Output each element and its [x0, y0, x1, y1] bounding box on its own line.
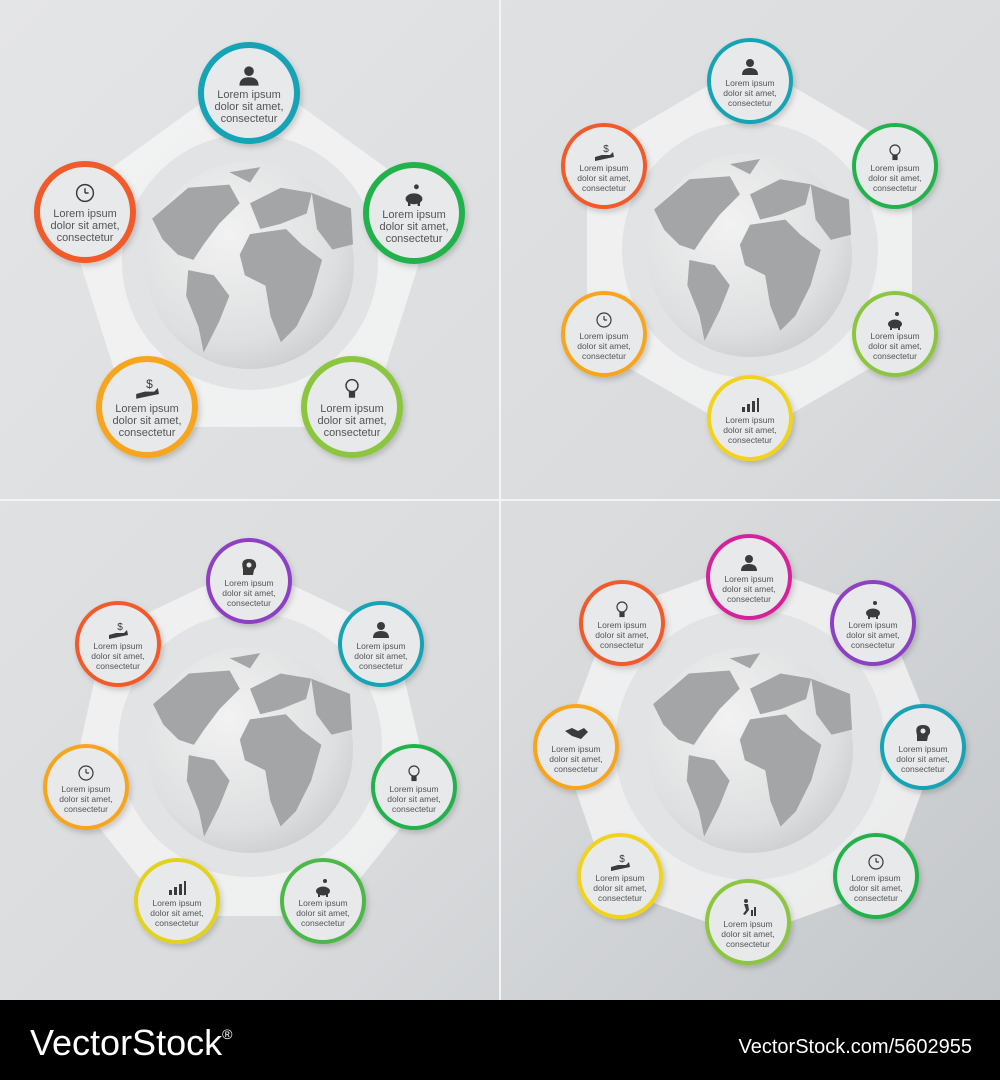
step circle: left: consectetur — [64, 804, 108, 814]
step circle: right: Lorem ipsum — [382, 209, 446, 221]
step circle: right: dolor sit amet, — [896, 754, 950, 764]
step circle: bottom right: consectetur — [324, 427, 381, 439]
step circle: lower left: dolor sit amet, — [593, 883, 647, 893]
step circle: top: Lorem ipsum — [724, 574, 774, 584]
step circle: bottom left: dolor sit amet, — [112, 415, 182, 427]
step circle: bottom: Lorem ipsum — [723, 919, 773, 929]
step circle: bottom right: consectetur — [873, 351, 917, 361]
step circle: upper right — [340, 603, 422, 685]
step circle: bottom left — [99, 359, 195, 455]
step circle: bottom left: consectetur — [119, 427, 176, 439]
step circle: top: Lorem ipsum — [217, 89, 281, 101]
step circle: right — [373, 746, 455, 828]
step circle: lower left: Lorem ipsum — [595, 873, 645, 883]
footer id: VectorStock.com/5602955 — [739, 1036, 972, 1058]
step circle: right: consectetur — [392, 804, 436, 814]
step circle: bottom — [709, 377, 791, 459]
step circle: bottom left: consectetur — [582, 351, 626, 361]
step circle: left: consectetur — [554, 764, 598, 774]
step circle: top: Lorem ipsum — [224, 578, 274, 588]
step circle: top right: dolor sit amet, — [868, 173, 922, 183]
step circle: top left: dolor sit amet, — [577, 173, 631, 183]
step circle: top right: consectetur — [873, 183, 917, 193]
step circle: upper left: consectetur — [600, 640, 644, 650]
step circle: top left: Lorem ipsum — [579, 163, 629, 173]
step circle: bottom right: dolor sit amet, — [868, 341, 922, 351]
step circle: top: dolor sit amet, — [214, 101, 284, 113]
step circle: upper right: Lorem ipsum — [848, 620, 898, 630]
step circle: top — [201, 45, 297, 141]
step circle: upper left: dolor sit amet, — [595, 630, 649, 640]
step circle: bottom left: Lorem ipsum — [152, 898, 202, 908]
step circle: lower left — [579, 835, 661, 917]
step circle: top: Lorem ipsum — [725, 78, 775, 88]
step circle: upper left: Lorem ipsum — [597, 620, 647, 630]
step circle: bottom: dolor sit amet, — [723, 425, 777, 435]
step circle: right: consectetur — [386, 233, 443, 245]
panel: eight-step diagram — [535, 536, 964, 963]
step circle: left — [45, 746, 127, 828]
step circle: top: consectetur — [727, 594, 771, 604]
step circle: bottom right: Lorem ipsum — [298, 898, 348, 908]
step circle: bottom: consectetur — [726, 939, 770, 949]
step circle: bottom left: consectetur — [155, 918, 199, 928]
step circle: top — [208, 540, 290, 622]
step circle: top — [709, 40, 791, 122]
footer logo: ® — [222, 1026, 233, 1042]
step circle: right: consectetur — [901, 764, 945, 774]
step circle: bottom left — [136, 860, 218, 942]
step circle: lower right: dolor sit amet, — [849, 883, 903, 893]
step circle: upper left: consectetur — [96, 661, 140, 671]
globe — [647, 647, 853, 853]
step circle: upper right: consectetur — [359, 661, 403, 671]
step circle: bottom: consectetur — [728, 435, 772, 445]
footer bar — [0, 1000, 1000, 1080]
step circle: top: consectetur — [728, 98, 772, 108]
step circle: top left — [563, 125, 645, 207]
step circle: lower right: consectetur — [854, 893, 898, 903]
step circle: upper right: consectetur — [851, 640, 895, 650]
step circle: bottom left: dolor sit amet, — [577, 341, 631, 351]
step circle: right: Lorem ipsum — [898, 744, 948, 754]
step circle: top: dolor sit amet, — [723, 88, 777, 98]
step circle: bottom right: dolor sit amet, — [317, 415, 387, 427]
panel: seven-step diagram — [45, 540, 455, 942]
step circle: right — [882, 706, 964, 788]
step circle: bottom right — [304, 359, 400, 455]
step circle: upper left — [581, 582, 663, 664]
step circle: bottom right: dolor sit amet, — [296, 908, 350, 918]
step circle: lower left: consectetur — [598, 893, 642, 903]
step circle: bottom right: consectetur — [301, 918, 345, 928]
step circle: right: Lorem ipsum — [389, 784, 439, 794]
panel: five-step diagram — [37, 45, 462, 455]
step circle: left: dolor sit amet, — [59, 794, 113, 804]
step circle: bottom right: Lorem ipsum — [870, 331, 920, 341]
step circle: left: Lorem ipsum — [551, 744, 601, 754]
step circle: upper right: Lorem ipsum — [356, 641, 406, 651]
step circle: left: Lorem ipsum — [53, 208, 117, 220]
step circle: left: consectetur — [57, 232, 114, 244]
step circle: bottom left: Lorem ipsum — [115, 403, 179, 415]
step circle: lower right — [835, 835, 917, 917]
step circle: top — [708, 536, 790, 618]
step circle: bottom right: Lorem ipsum — [320, 403, 384, 415]
step circle: bottom left: Lorem ipsum — [579, 331, 629, 341]
step circle: lower right: Lorem ipsum — [851, 873, 901, 883]
step circle: left: dolor sit amet, — [549, 754, 603, 764]
step circle: right: dolor sit amet, — [379, 221, 449, 233]
step circle: upper left: Lorem ipsum — [93, 641, 143, 651]
step circle: top right — [854, 125, 936, 207]
step circle: upper right — [832, 582, 914, 664]
step circle: left — [535, 706, 617, 788]
step circle: upper right: dolor sit amet, — [354, 651, 408, 661]
panel: six-step diagram — [563, 40, 936, 459]
step circle: upper left — [77, 603, 159, 685]
footer logo: VectorStock — [30, 1022, 222, 1063]
step circle: left: Lorem ipsum — [61, 784, 111, 794]
step circle: top right: Lorem ipsum — [870, 163, 920, 173]
step circle: top: consectetur — [227, 598, 271, 608]
step circle: top: dolor sit amet, — [222, 588, 276, 598]
step circle: left — [37, 164, 133, 260]
globe — [146, 161, 354, 369]
globe — [147, 647, 353, 853]
step circle: bottom left — [563, 293, 645, 375]
step circle: bottom left: dolor sit amet, — [150, 908, 204, 918]
step circle: bottom right — [282, 860, 364, 942]
globe — [648, 153, 852, 357]
step circle: top: consectetur — [221, 113, 278, 125]
step circle: right: dolor sit amet, — [387, 794, 441, 804]
step circle: upper left: dolor sit amet, — [91, 651, 145, 661]
step circle: bottom: dolor sit amet, — [721, 929, 775, 939]
step circle: bottom: Lorem ipsum — [725, 415, 775, 425]
step circle: bottom — [707, 881, 789, 963]
step circle: top left: consectetur — [582, 183, 626, 193]
step circle: left: dolor sit amet, — [50, 220, 120, 232]
step circle: upper right: dolor sit amet, — [846, 630, 900, 640]
step circle: bottom right — [854, 293, 936, 375]
step circle: right — [366, 165, 462, 261]
step circle: top: dolor sit amet, — [722, 584, 776, 594]
